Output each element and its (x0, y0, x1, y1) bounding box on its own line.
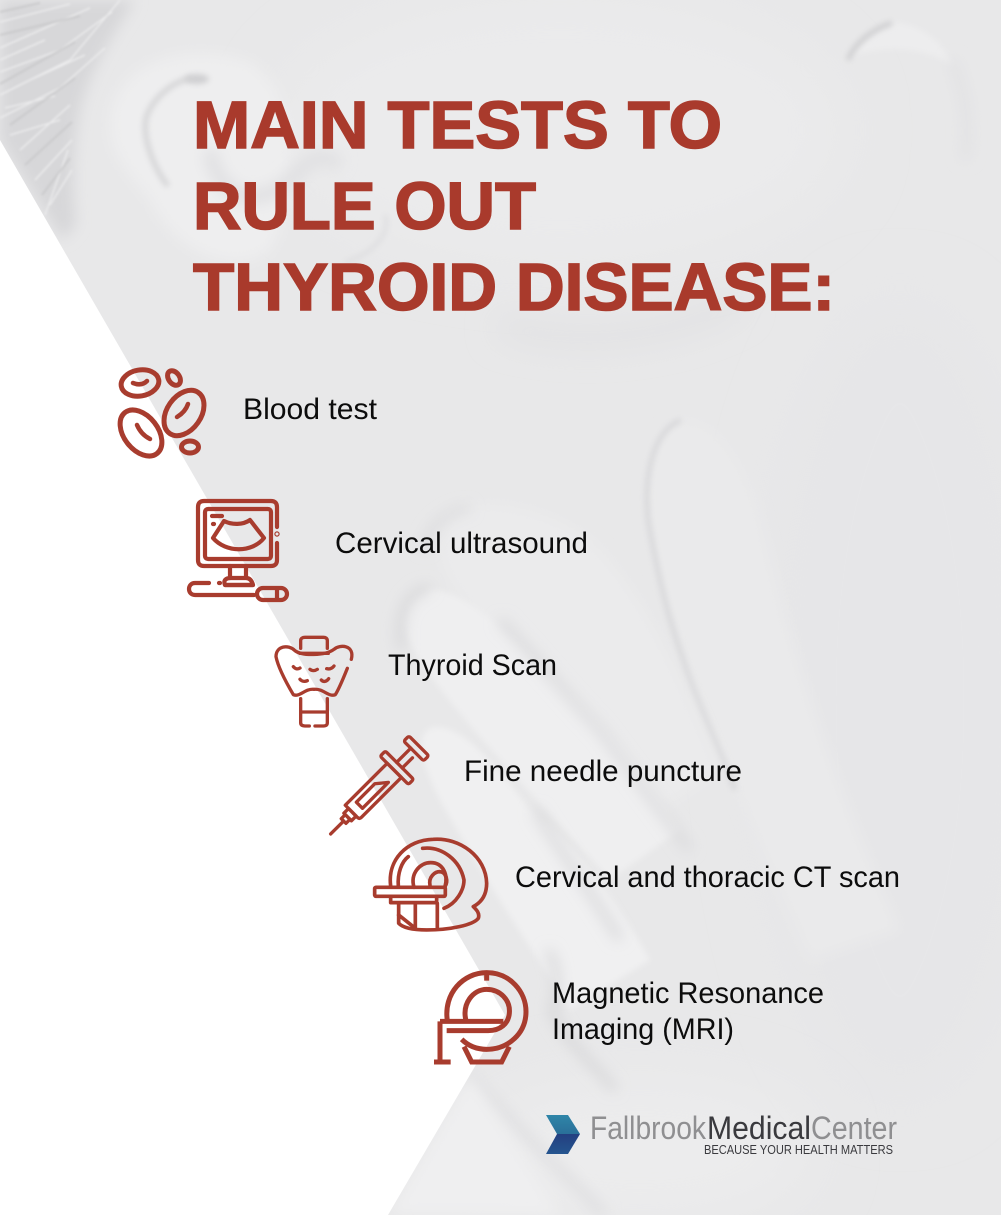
icon: logo chevron (546, 1115, 580, 1154)
hair (0, 0, 135, 240)
label: blood test: Blood test (243, 393, 377, 426)
label: CT scan: Cervical and thoracic CT scan (515, 861, 900, 894)
logo: Fallbrook Medical Center: Center (811, 1110, 897, 1146)
ear (110, 53, 290, 262)
title: MAIN TESTS TO (193, 88, 722, 163)
title: THYROID DISEASE: (193, 250, 835, 325)
white diagonal panel (0, 140, 505, 1215)
icon: blood cells (112, 367, 212, 464)
icon: thyroid (276, 637, 352, 726)
nostril (846, 22, 952, 65)
label: magnetic resonance imaging: Magnetic Resonance (552, 977, 824, 1010)
icon: ultrasound machine (189, 501, 287, 600)
icon: CT scanner (375, 839, 487, 930)
icon: MRI scanner (434, 973, 526, 1062)
logo: Fallbrook Medical Center (546, 1110, 897, 1157)
icon: syringe (317, 732, 433, 848)
logo: Fallbrook Medical Center: Medical (707, 1110, 811, 1146)
fingers (647, 420, 900, 960)
label: magnetic resonance imaging: Imaging (MRI) (552, 1013, 734, 1046)
logo: Fallbrook Medical Center: BECAUSE YOUR HEALTH MATTERS (704, 1142, 893, 1157)
title: RULE OUT (193, 169, 536, 244)
label: thyroid scan: Thyroid Scan (388, 649, 557, 682)
label: cervical ultrasound: Cervical ultrasound (335, 527, 588, 560)
label: magnetic resonance imaging (552, 977, 824, 1046)
logo: Fallbrook Medical Center: Fallbrook (590, 1110, 707, 1146)
label: fine needle puncture: Fine needle puncture (464, 755, 742, 788)
title (193, 88, 835, 325)
jaw shadow (500, 300, 740, 338)
